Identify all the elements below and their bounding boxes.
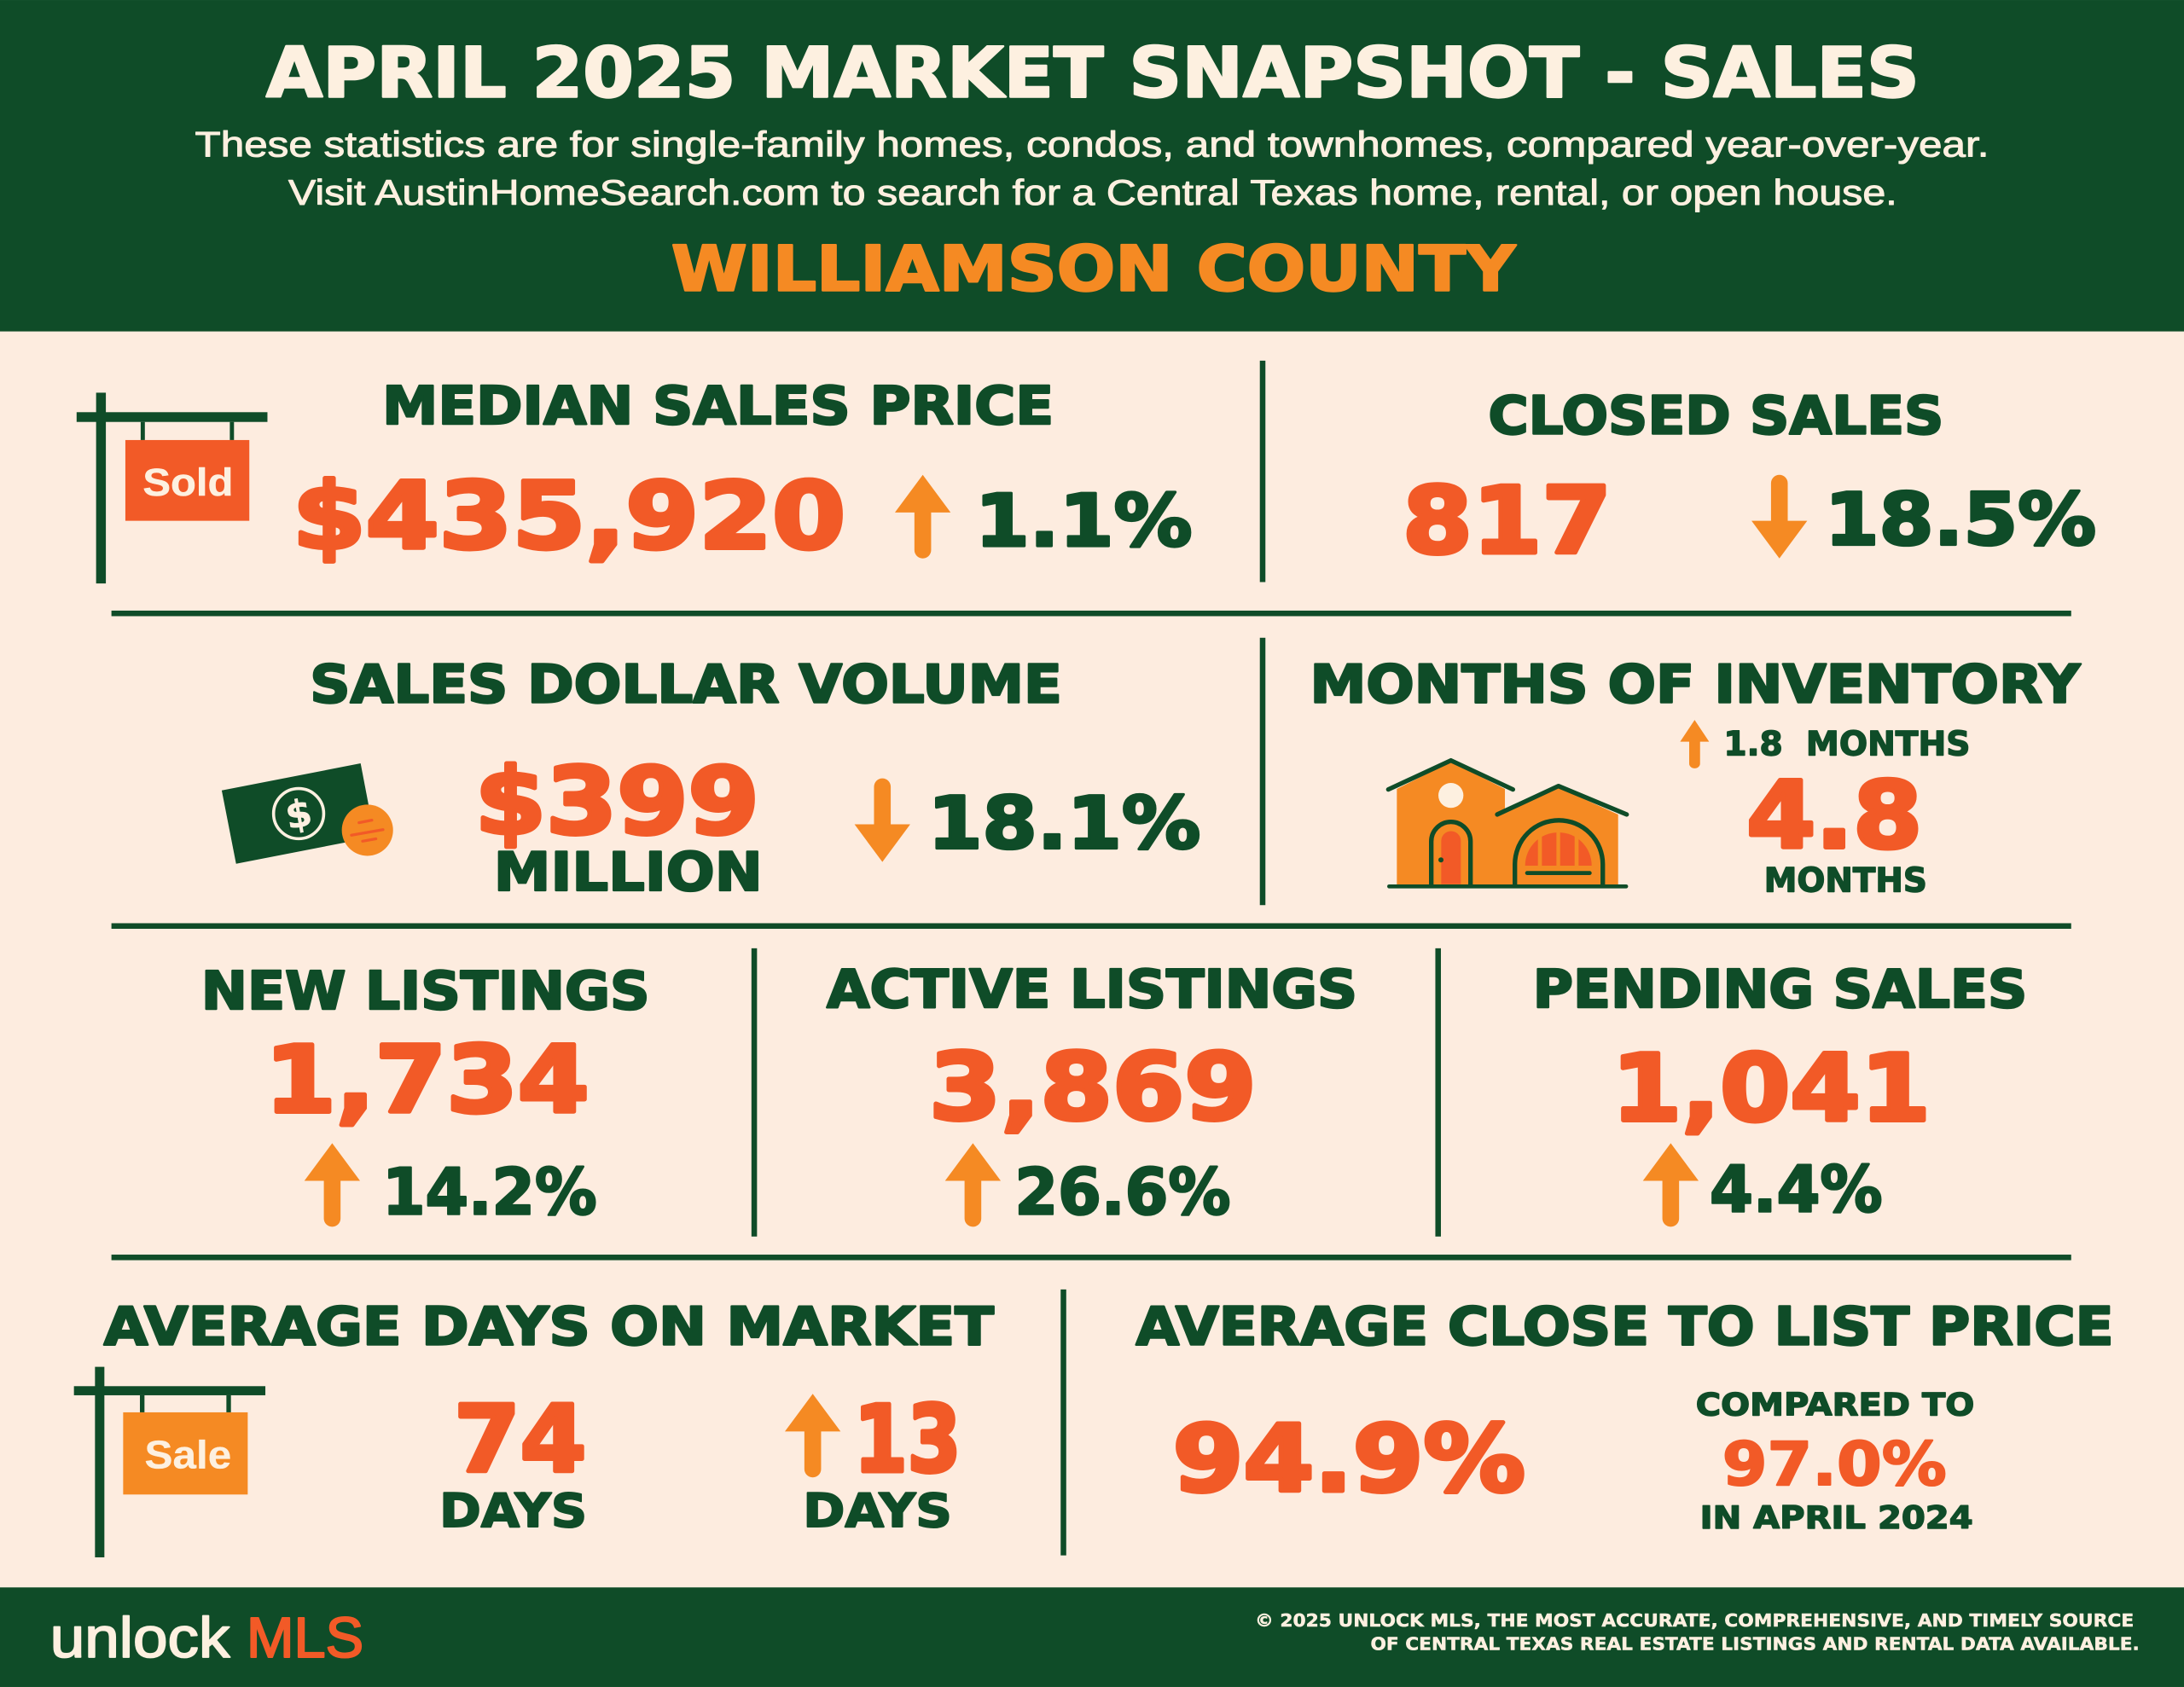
logo: unlock MLS: unlock: [50, 1606, 230, 1670]
change: closed sales: 18.5%: [1825, 478, 2096, 562]
copyright text: © 2025 UNLOCK MLS, THE MOST ACCURATE, COMPREHENSIVE, AND TIMELY SOURCE: [1255, 1610, 2134, 1631]
divider: [1260, 361, 1265, 582]
comparison text: COMPARED TO: [1696, 1387, 1974, 1423]
title: APRIL 2025 MARKET SNAPSHOT - SALES: [266, 33, 1920, 113]
heading: months of inventory: MONTHS OF INVENTORY: [1310, 655, 2081, 716]
value: close to list: 94.9%: [1173, 1406, 1525, 1513]
heading: sales dollar volume: SALES DOLLAR VOLUME: [310, 655, 1062, 716]
heading: average days on market: AVERAGE DAYS ON MARKET: [104, 1296, 994, 1357]
heading: average close to list price: AVERAGE CLOSE TO LIST PRICE: [1136, 1296, 2114, 1357]
panel: closed sales: [1403, 386, 2096, 575]
value: pending sales: 1,041: [1612, 1035, 1931, 1142]
heading: median sales price: MEDIAN SALES PRICE: [382, 376, 1054, 437]
arrow up: [1643, 1143, 1699, 1226]
arrow up: [785, 1394, 840, 1477]
panel: months of inventory: [1310, 655, 2081, 901]
value: dollar volume: $399: [475, 749, 759, 855]
change: pending sales: 4.4%: [1710, 1151, 1883, 1226]
copyright text: OF CENTRAL TEXAS REAL ESTATE LISTINGS AND RENTAL DATA AVAILABLE.: [1371, 1634, 2140, 1655]
icon: sold sign: [77, 392, 267, 583]
copyright text: [1255, 1610, 2140, 1655]
panel: average close to list price: [1136, 1296, 2114, 1536]
icon: sold sign: Sold: [142, 461, 233, 504]
change: days on market: 13: [854, 1387, 961, 1493]
county heading: WILLIAMSON COUNTY: [671, 233, 1516, 305]
value: closed sales: 817: [1403, 468, 1612, 575]
arrow down: [855, 779, 910, 862]
value: new listings: 1,734: [264, 1028, 590, 1134]
footer: [0, 1587, 2184, 1687]
heading: closed sales: CLOSED SALES: [1488, 386, 1943, 447]
header banner: [0, 0, 2184, 332]
arrow up small: [1680, 720, 1709, 768]
value: active listings: 3,869: [929, 1035, 1257, 1141]
change: new listings: 14.2%: [382, 1155, 597, 1230]
arrow up: [945, 1143, 1001, 1226]
value: days on market: 74: [454, 1387, 586, 1493]
panel: new listings: [201, 961, 650, 1230]
icon: money bill and coin: [222, 763, 393, 864]
arrow up: [305, 1143, 360, 1226]
arrow down: [1751, 475, 1807, 559]
change: dollar volume: 18.1%: [927, 781, 1200, 866]
panel: average days on market: [74, 1296, 994, 1557]
icon: sale sign: [74, 1367, 265, 1557]
subtitle text: [195, 125, 1989, 212]
panel: median sales price: [77, 376, 1193, 583]
change: median price: 1.1%: [975, 479, 1193, 564]
heading: new listings: NEW LISTINGS: [201, 961, 650, 1022]
change: active listings: 26.6%: [1014, 1155, 1230, 1230]
panel: sales dollar volume: [222, 655, 1200, 903]
value: months of inventory: 4.8: [1746, 762, 1922, 869]
logo: unlock MLS: MLS: [247, 1606, 363, 1670]
label: days change: DAYS: [803, 1483, 952, 1538]
icon: money bill and coin: $: [282, 791, 316, 838]
subtitle text: These statistics are for single-family homes, condos, and townhomes, compared year-over-year.: [195, 125, 1989, 165]
label: months: MONTHS: [1764, 862, 1927, 901]
comparison text: 97.0%: [1722, 1429, 1947, 1499]
heading: active listings: ACTIVE LISTINGS: [827, 959, 1357, 1020]
label: days: DAYS: [439, 1483, 587, 1538]
comparison text: [1696, 1387, 1974, 1536]
icon: house: [1388, 761, 1627, 886]
comparison text: IN APRIL 2024: [1700, 1499, 1973, 1536]
panel: pending sales: [1533, 959, 2027, 1226]
logo: unlock MLS: [50, 1606, 363, 1670]
heading: pending sales: PENDING SALES: [1533, 959, 2027, 1020]
panel: active listings: [827, 959, 1357, 1230]
change: months of inventory: 1.8 MONTHS: [1723, 726, 1970, 764]
value: median price: $435,920: [293, 463, 845, 570]
icon: sale sign: Sale: [145, 1433, 231, 1477]
subtitle text: Visit AustinHomeSearch.com to search for a Central Texas home, rental, or open house.: [288, 172, 1897, 212]
label: million: MILLION: [494, 841, 763, 903]
arrow up: [895, 475, 950, 559]
